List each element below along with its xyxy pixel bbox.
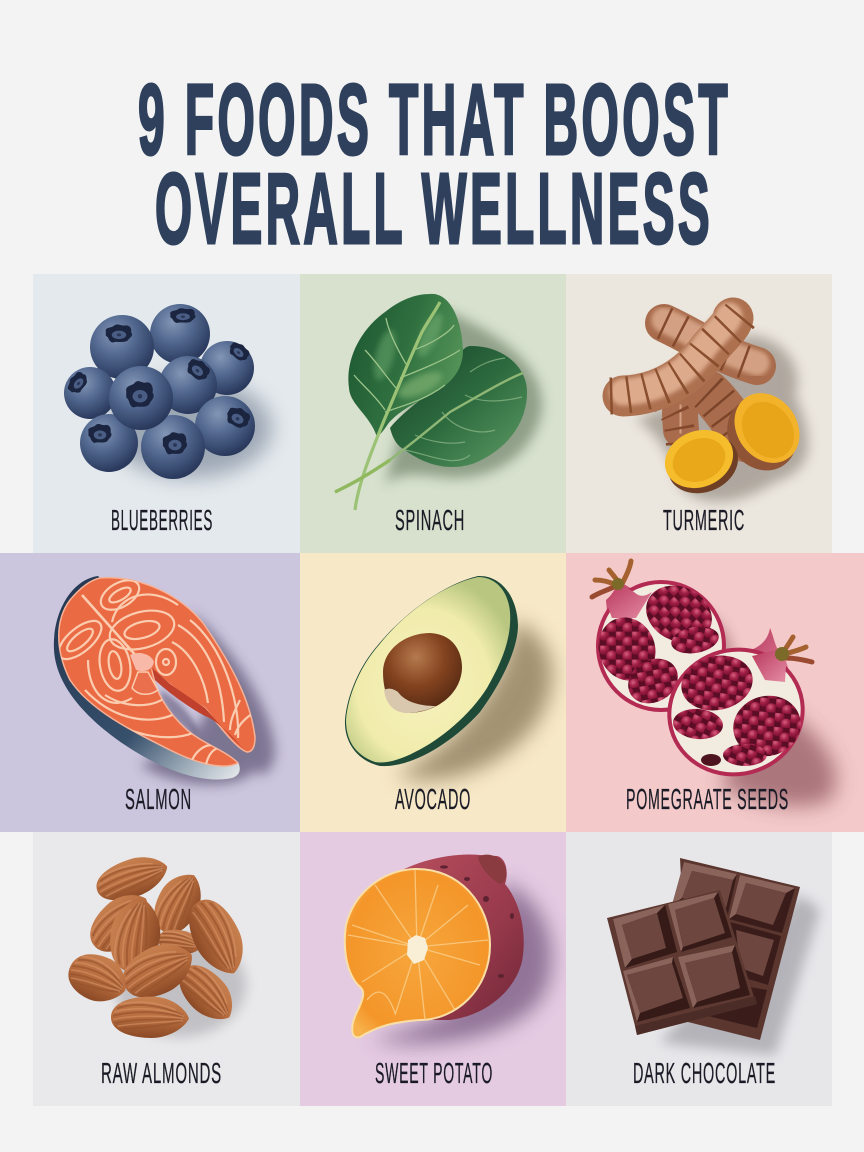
icon: salmon steak	[52, 574, 275, 784]
panel: avocado: AVOCADO	[395, 784, 471, 816]
panel background: sweet potato	[300, 832, 566, 1106]
panel background: avocado	[300, 553, 566, 832]
chocolate: front bar	[607, 890, 757, 1035]
panel background: pomegranate	[566, 553, 864, 832]
panel: salmon	[0, 553, 300, 832]
panel background: turmeric	[566, 274, 832, 553]
icon: avocado half	[345, 576, 552, 780]
panel background: blueberries	[33, 274, 300, 553]
icon: spinach leaves	[335, 294, 542, 510]
panel: sweet potato: SWEET POTATO	[375, 1058, 493, 1090]
label: spinach: SPINACH	[395, 505, 465, 537]
panel: sweet potato	[300, 832, 566, 1106]
fruit: left half	[590, 561, 726, 712]
panel: turmeric	[566, 274, 832, 553]
icon: pomegranate halves	[590, 561, 836, 806]
label: salmon: SALMON	[125, 784, 192, 816]
icon: sweet potato half	[345, 854, 552, 1044]
panel: blueberries: BLUEBERRIES	[111, 505, 213, 537]
panel background: almonds	[33, 832, 300, 1106]
fruit: right half	[653, 628, 819, 792]
title	[138, 64, 731, 265]
label: raw almonds: RAW ALMONDS	[101, 1058, 222, 1090]
icon: turmeric roots	[610, 305, 813, 503]
panel: blueberries	[33, 274, 300, 553]
panel: turmeric: TURMERIC	[663, 505, 745, 537]
panel background: chocolate	[566, 832, 832, 1106]
panel: spinach	[300, 274, 566, 553]
panel: raw almonds	[33, 832, 300, 1106]
icon: dark chocolate bars	[607, 858, 820, 1055]
panel: dark chocolate	[566, 832, 832, 1106]
panel: pomegranate seeds	[566, 553, 864, 832]
icon: raw almonds	[61, 849, 254, 1039]
icon: blueberries	[64, 304, 272, 479]
panel background: salmon	[0, 553, 300, 832]
chocolate: back bar	[672, 858, 800, 1040]
panel: avocado	[300, 553, 566, 832]
panel background: spinach	[300, 274, 566, 553]
